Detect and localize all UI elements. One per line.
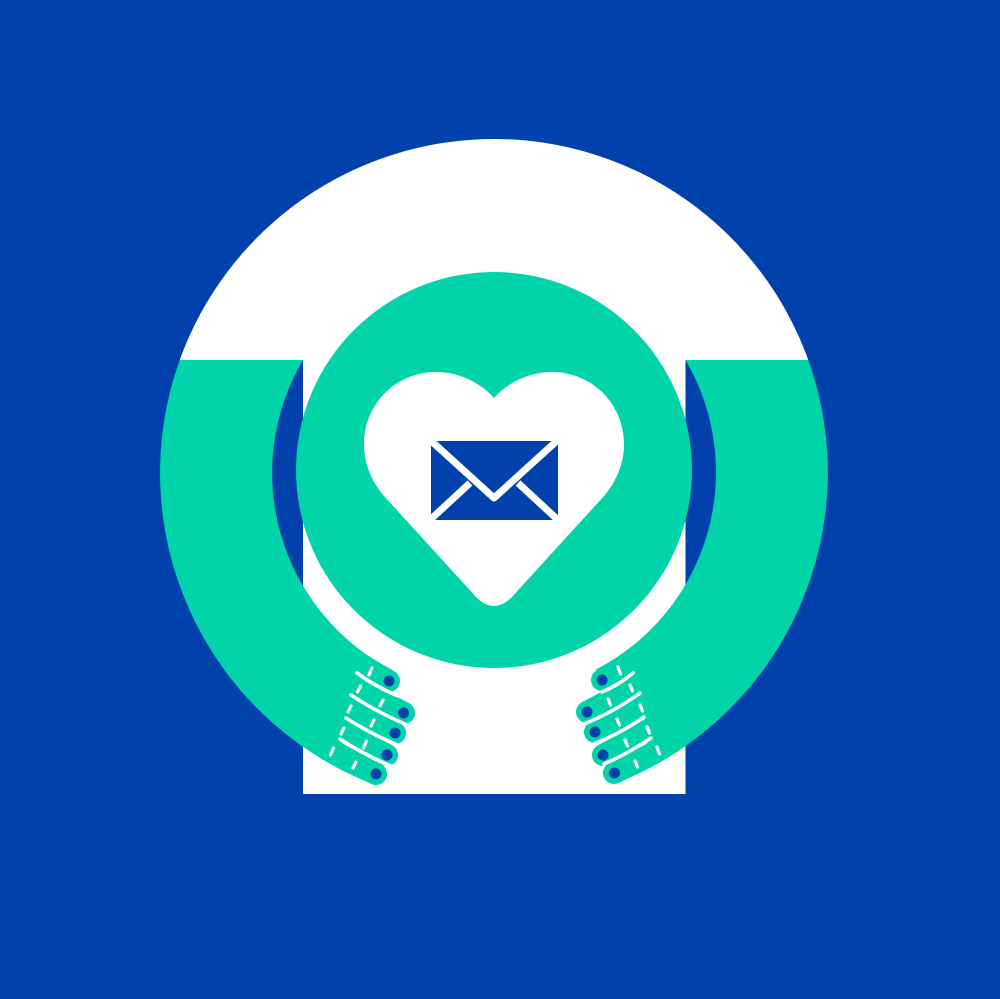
green circle — [296, 272, 692, 668]
figure: white head and body — [180, 139, 808, 794]
left arm and hand — [160, 360, 412, 783]
right arm and hand — [582, 360, 828, 781]
icon: heart — [364, 372, 624, 606]
icon: envelope — [428, 438, 560, 520]
